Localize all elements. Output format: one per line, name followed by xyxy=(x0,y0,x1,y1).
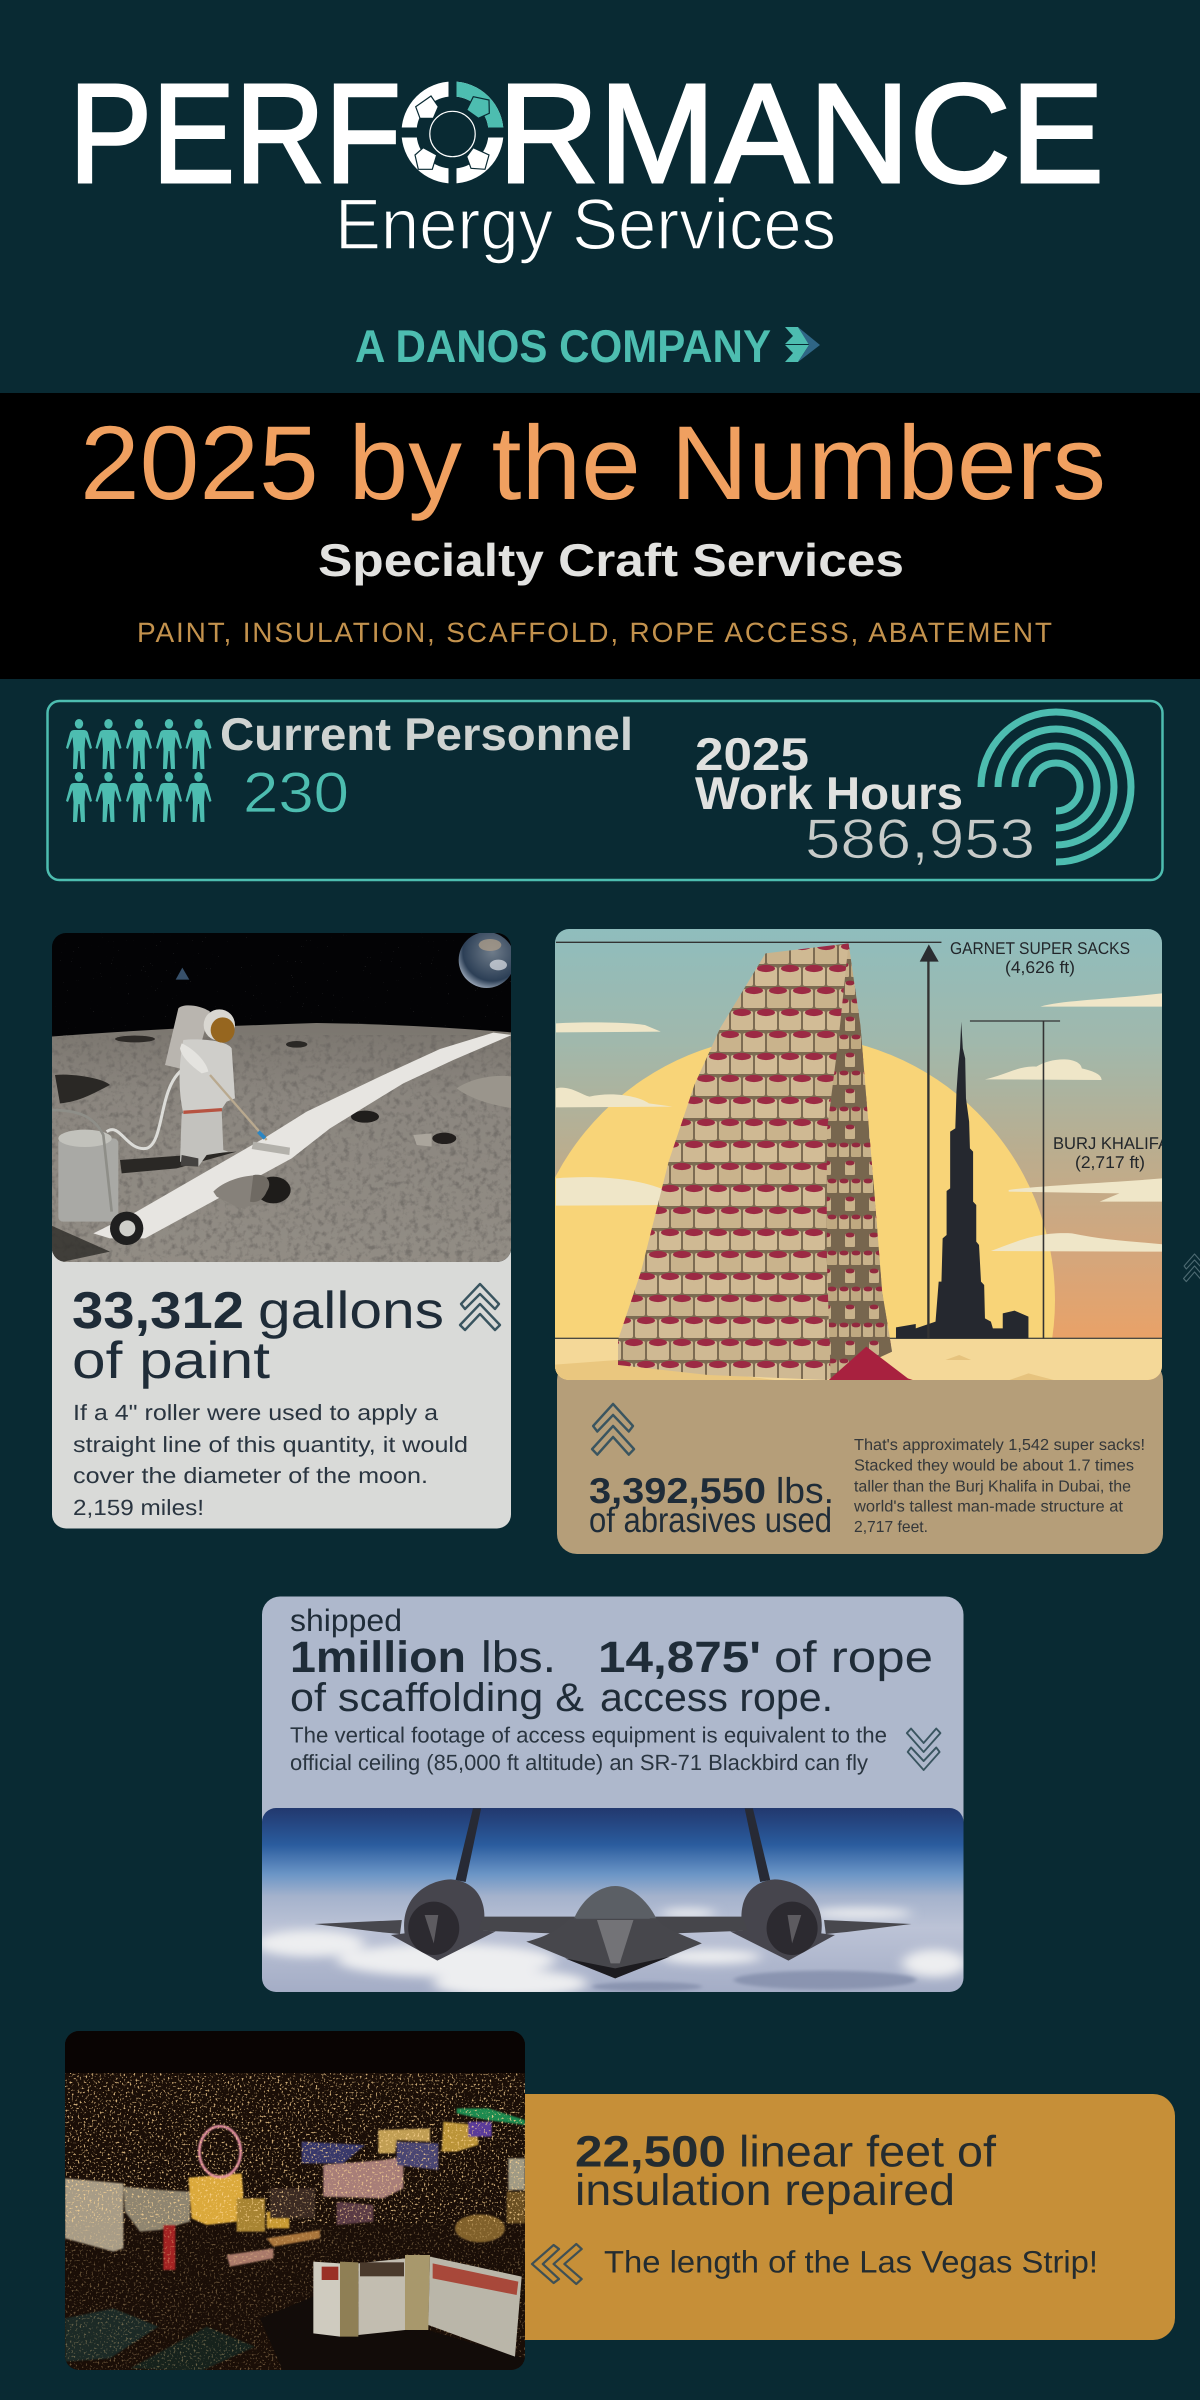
heading: 3,392,550 lbs. of abrasives used: of abrasives used xyxy=(589,1501,832,1540)
icon: ten people xyxy=(66,719,212,822)
card: insulation text background xyxy=(500,2094,1175,2340)
text: paint comparison: 2,159 miles! xyxy=(73,1495,204,1520)
value: 586,953: 586,953 xyxy=(805,807,1035,870)
subtitle: Specialty Craft Services: Specialty Craft Services xyxy=(318,534,904,586)
paint line xyxy=(93,1033,512,1238)
heading: 14,875' of rope access rope: 14,875' xyxy=(598,1633,761,1682)
icon: double chevron left xyxy=(532,2244,582,2284)
text: paint comparison xyxy=(73,1400,468,1520)
heading: shipped 1 million lbs. of scaffolding: 1million xyxy=(290,1633,466,1682)
garnet pile xyxy=(829,1347,916,1381)
heading: shipped 1 million lbs. of scaffolding: of scaffolding & xyxy=(290,1676,584,1720)
text: paint comparison: If a 4" roller were used to apply a xyxy=(73,1400,439,1425)
logo: gear-shaped letter O xyxy=(400,80,505,185)
text: abrasives comparison xyxy=(853,1437,1145,1536)
panel: insulation xyxy=(65,2031,1175,2372)
icon: faint chevron at right edge xyxy=(1184,1254,1200,1282)
card: paint text background xyxy=(52,1240,511,1528)
heading: 14,875' of rope access rope xyxy=(598,1633,933,1720)
service list: PAINT, INSULATION, SCAFFOLD, ROPE ACCESS, ABATEMENT xyxy=(137,617,1052,648)
logo wordmark: Performance: O xyxy=(408,62,498,208)
banner: 2025 by the Numbers xyxy=(0,393,1200,679)
heading: shipped 1 million lbs. of scaffolding: lbs. xyxy=(481,1633,556,1682)
text: SR-71 comparison xyxy=(290,1722,887,1775)
heading: shipped 1 million lbs. of scaffolding: shipped xyxy=(290,1603,402,1638)
text: abrasives comparison: 2,717 feet. xyxy=(854,1519,928,1536)
text: abrasives comparison: taller than the Burj Khalifa in Dubai, the xyxy=(854,1478,1131,1496)
dark foreground xyxy=(260,2297,525,2372)
image: astronaut painting a line on the moon xyxy=(50,932,523,1272)
city lights xyxy=(65,2073,525,2223)
hotels xyxy=(65,2178,123,2252)
label: current personnel: Current Personnel xyxy=(220,708,633,760)
image: stack of garnet super sacks versus Burj Khalifa: (2,717 ft) xyxy=(1075,1153,1145,1172)
heading: 22,500 linear feet of insulation repaired xyxy=(575,2128,997,2215)
sand ground xyxy=(555,1339,1162,1380)
heading: 22,500 linear feet of insulation repaired: insulation repaired xyxy=(575,2166,955,2215)
text: abrasives comparison: That's approximately 1,542 super sacks! xyxy=(854,1437,1145,1454)
heading: 14,875' of rope access rope: access rope. xyxy=(600,1676,833,1720)
panel: paint xyxy=(50,932,523,1528)
label: 2025 work hours: Work Hours xyxy=(695,767,963,819)
icon: double chevron up xyxy=(592,1404,634,1455)
heading: 3,392,550 lbs. of abrasives used xyxy=(589,1470,834,1540)
value: 230: 230 xyxy=(243,761,349,825)
text: SR-71 comparison: The vertical footage of access equipment is equivalent to the xyxy=(290,1722,887,1748)
measure lines xyxy=(556,942,1060,1338)
image: Las Vegas Strip at night xyxy=(65,2031,525,2372)
title: 2025 by the Numbers xyxy=(80,405,1106,522)
icon: double chevron down xyxy=(907,1729,940,1770)
heading: 33,312 gallons of paint: 33,312 xyxy=(72,1282,244,1340)
image: stack of garnet super sacks versus Burj Khalifa: (4,626 ft) xyxy=(1005,958,1075,977)
label: garnet super sacks: GARNET SUPER SACKS xyxy=(950,939,1130,958)
heading: 22,500 linear feet of insulation repaired: 22,500 xyxy=(575,2128,726,2176)
heading: 33,312 gallons of paint: of paint xyxy=(72,1332,271,1390)
panel: scaffolding and rope xyxy=(255,1596,966,1997)
text: paint comparison: cover the diameter of the moon. xyxy=(73,1463,428,1488)
text: Las Vegas Strip comparison: The length of the Las Vegas Strip! xyxy=(604,2244,1098,2280)
image: SR-71 Blackbird above clouds xyxy=(255,1808,966,1997)
logo wordmark: Performance: PERF xyxy=(69,54,401,212)
sack tower xyxy=(618,943,892,1380)
panel: abrasives xyxy=(525,929,1170,1565)
logo wordmark: Performance xyxy=(69,54,1104,212)
heading: 33,312 gallons of paint: gallons xyxy=(258,1282,444,1340)
Burj Khalifa silhouette xyxy=(896,1022,1028,1338)
icon: Danos chevron xyxy=(785,327,820,362)
earth xyxy=(459,932,515,988)
icon: double chevron up xyxy=(460,1284,500,1330)
hose xyxy=(106,1070,180,1150)
label: Burj Khalifa: BURJ KHALIFA xyxy=(1053,1134,1170,1153)
heading: 33,312 gallons of paint xyxy=(72,1282,444,1390)
heading: 22,500 linear feet of insulation repaired: linear feet of xyxy=(739,2128,997,2176)
heading: shipped 1 million lbs. of scaffolding xyxy=(290,1603,584,1720)
Mirage hotel xyxy=(313,2262,340,2337)
card: abrasives text background xyxy=(557,1360,1163,1554)
tagline: A Danos Company: A DANOS COMPANY xyxy=(355,320,771,372)
label: 2025 work hours: 2025 xyxy=(695,728,809,780)
heading: 3,392,550 lbs. of abrasives used: 3,392,550 xyxy=(589,1470,766,1511)
paint tank xyxy=(58,1138,118,1222)
logo subtitle: Energy Services: Energy Services xyxy=(335,185,836,265)
text: abrasives comparison: world's tallest man-made structure at xyxy=(853,1498,1124,1516)
icon: concentric arcs xyxy=(981,712,1131,862)
panel: personnel and work hours xyxy=(48,701,1162,880)
card: scaffolding text background xyxy=(262,1596,964,1992)
heading: 3,392,550 lbs. of abrasives used: lbs. xyxy=(776,1470,834,1511)
text: paint comparison: straight line of this quantity, it would xyxy=(73,1432,468,1457)
clouds xyxy=(556,993,1163,1252)
label: 2025 work hours xyxy=(695,728,963,819)
heading: 14,875' of rope access rope: of rope xyxy=(774,1633,933,1682)
text: abrasives comparison: Stacked they would be about 1.7 times xyxy=(854,1458,1134,1474)
small triangle xyxy=(176,968,189,980)
logo: Performance Energy Services xyxy=(69,54,1104,265)
logo wordmark: Performance: RMANCE xyxy=(498,54,1104,212)
astronaut xyxy=(165,1005,210,1072)
image: stack of garnet super sacks versus Burj Khalifa xyxy=(555,929,1162,1380)
parking lots xyxy=(65,2308,158,2362)
text: SR-71 comparison: official ceiling (85,000 ft altitude) an SR-71 Blackbird can fly xyxy=(290,1750,868,1775)
